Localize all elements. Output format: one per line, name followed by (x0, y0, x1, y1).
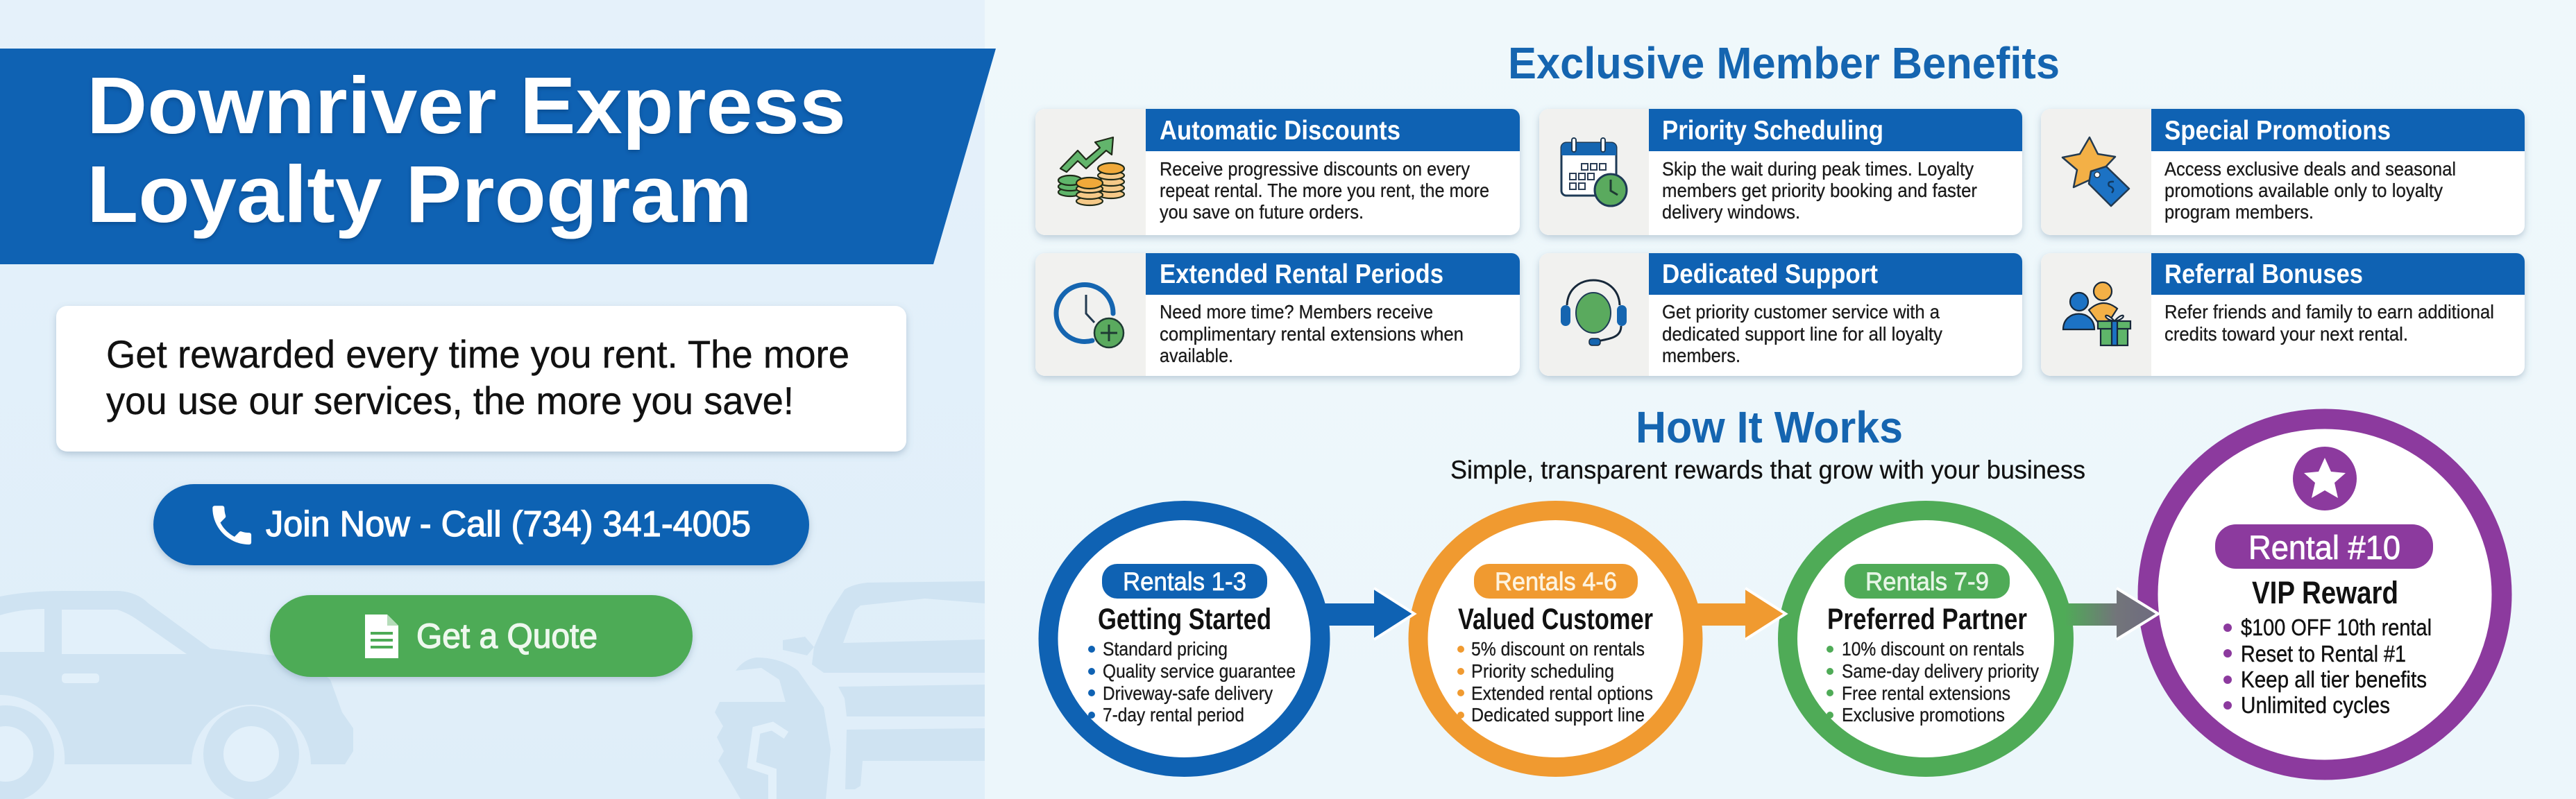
intro text panel: Get rewarded every time you rent. The more (106, 332, 849, 376)
card text: repeat rental. The more you rent, the more (1160, 180, 1489, 201)
tier list: Quality service guarantee (1103, 660, 1296, 682)
icon: phone (212, 506, 251, 544)
panel: left hero background (0, 0, 985, 799)
reward title: VIP Reward (2252, 575, 2398, 610)
card title: Dedicated Support (1662, 259, 1878, 289)
tier list: Extended rental options (1471, 682, 1653, 704)
card text: Get priority customer service with a (1662, 301, 1940, 323)
icon: document (365, 615, 398, 658)
card text: you save on future orders. (1160, 201, 1364, 223)
card text: Refer friends and family to earn additional (2164, 301, 2494, 323)
tier pill: Rentals 7-9 (1865, 567, 1989, 596)
card title: Referral Bonuses (2164, 259, 2363, 289)
card text: Skip the wait during peak times. Loyalty (1662, 158, 1974, 180)
reward pill (2215, 524, 2433, 569)
tier list: Dedicated support line (1471, 704, 1645, 725)
card text: members. (1662, 345, 1740, 366)
title banner (0, 49, 996, 264)
card title: Extended Rental Periods (1160, 259, 1443, 289)
tier circle: rentals 1-3 (1048, 510, 1320, 767)
icon: clock with plus (1056, 285, 1124, 347)
tier list (1088, 638, 1296, 725)
card: dedicated support (1539, 253, 2022, 376)
card text (1662, 301, 1942, 366)
tier list: Driveway-safe delivery (1103, 682, 1273, 704)
icon: coins and arrow (1058, 137, 1124, 205)
icon: star and tag (2062, 137, 2129, 206)
tier pill (1474, 564, 1638, 599)
title (87, 60, 846, 239)
card title: Automatic Discounts (1160, 116, 1400, 146)
reward list: $100 OFF 10th rental (2241, 615, 2432, 640)
card text: Access exclusive deals and seasonal (2164, 158, 2456, 180)
intro text panel: you use our services, the more you save! (106, 379, 794, 422)
intro text panel (56, 306, 906, 452)
card text: dedicated support line for all loyalty (1662, 323, 1942, 345)
card title: Special Promotions (2164, 116, 2391, 146)
tier list: 5% discount on rentals (1471, 638, 1645, 660)
icon: star badge (2293, 447, 2357, 510)
icon: calendar with clock (1561, 138, 1627, 206)
tier list: Standard pricing (1103, 638, 1228, 660)
card text: Receive progressive discounts on every (1160, 158, 1470, 180)
reward list: Reset to Rental #1 (2241, 641, 2406, 667)
card: referral bonuses (2041, 253, 2525, 376)
icon: faint car right (715, 581, 985, 799)
tier title: Getting Started (1098, 603, 1271, 636)
arrow: green to purple (2065, 588, 2158, 639)
icon: faint car left (0, 591, 353, 799)
card text: members get priority booking and faster (1662, 180, 1977, 201)
card title: Priority Scheduling (1662, 116, 1883, 146)
heading: exclusive member benefits: Exclusive Member Benefits (1508, 38, 2060, 88)
icon: headset (1561, 280, 1627, 345)
card text: available. (1160, 345, 1233, 366)
tier title: Valued Customer (1458, 603, 1653, 636)
arrow: orange (1693, 588, 1786, 639)
reward list (2223, 615, 2432, 718)
title: Downriver Express (87, 60, 846, 151)
card text: delivery windows. (1662, 201, 1800, 223)
tier list: 7-day rental period (1103, 704, 1244, 725)
reward list: Unlimited cycles (2241, 692, 2390, 718)
arrow: blue (1322, 588, 1414, 639)
button: get a quote: Get a Quote (416, 617, 598, 655)
card text (1160, 301, 1464, 366)
tier pill: Rentals 4-6 (1495, 567, 1617, 596)
card text (1662, 158, 1977, 223)
heading: how it works: How It Works (1636, 402, 1903, 452)
button: join now (153, 484, 809, 565)
card text: complimentary rental extensions when (1160, 323, 1464, 345)
tier list: Same-day delivery priority (1842, 660, 2039, 682)
tier circle: rental 10 vip reward (2148, 419, 2502, 770)
tier pill: Rentals 1-3 (1123, 567, 1246, 596)
card text (2164, 158, 2456, 223)
card: priority scheduling (1539, 109, 2022, 235)
card: extended rental periods (1035, 253, 1520, 376)
card text: program members. (2164, 201, 2314, 223)
tier circle: rentals 7-9 (1788, 510, 2064, 767)
subtitle: Simple, transparent rewards that grow with your business (1450, 456, 2085, 484)
tier circle: rentals 4-6 (1418, 510, 1693, 767)
card text (1160, 158, 1489, 223)
card text (2164, 301, 2494, 345)
card: automatic discounts (1035, 109, 1520, 235)
tier pill (1845, 564, 2010, 599)
reward pill: Rental #10 (2248, 530, 2400, 567)
tier list: Free rental extensions (1842, 682, 2010, 704)
card text: Need more time? Members receive (1160, 301, 1433, 323)
icon: people with gift (2063, 282, 2130, 345)
tier title: Preferred Partner (1827, 603, 2027, 636)
card: special promotions (2041, 109, 2525, 235)
tier list (1827, 638, 2039, 725)
tier list: 10% discount on rentals (1842, 638, 2024, 660)
tier pill (1102, 564, 1267, 599)
tier list: Exclusive promotions (1842, 704, 2005, 725)
tier list (1457, 638, 1653, 725)
tier list: Priority scheduling (1471, 660, 1614, 682)
button: join now: Join Now - Call (734) 341-4005 (266, 504, 751, 544)
title: Loyalty Program (87, 149, 752, 239)
reward list: Keep all tier benefits (2241, 667, 2427, 692)
card text: credits toward your next rental. (2164, 323, 2408, 345)
card text: promotions available only to loyalty (2164, 180, 2443, 201)
button: get a quote (270, 595, 693, 677)
